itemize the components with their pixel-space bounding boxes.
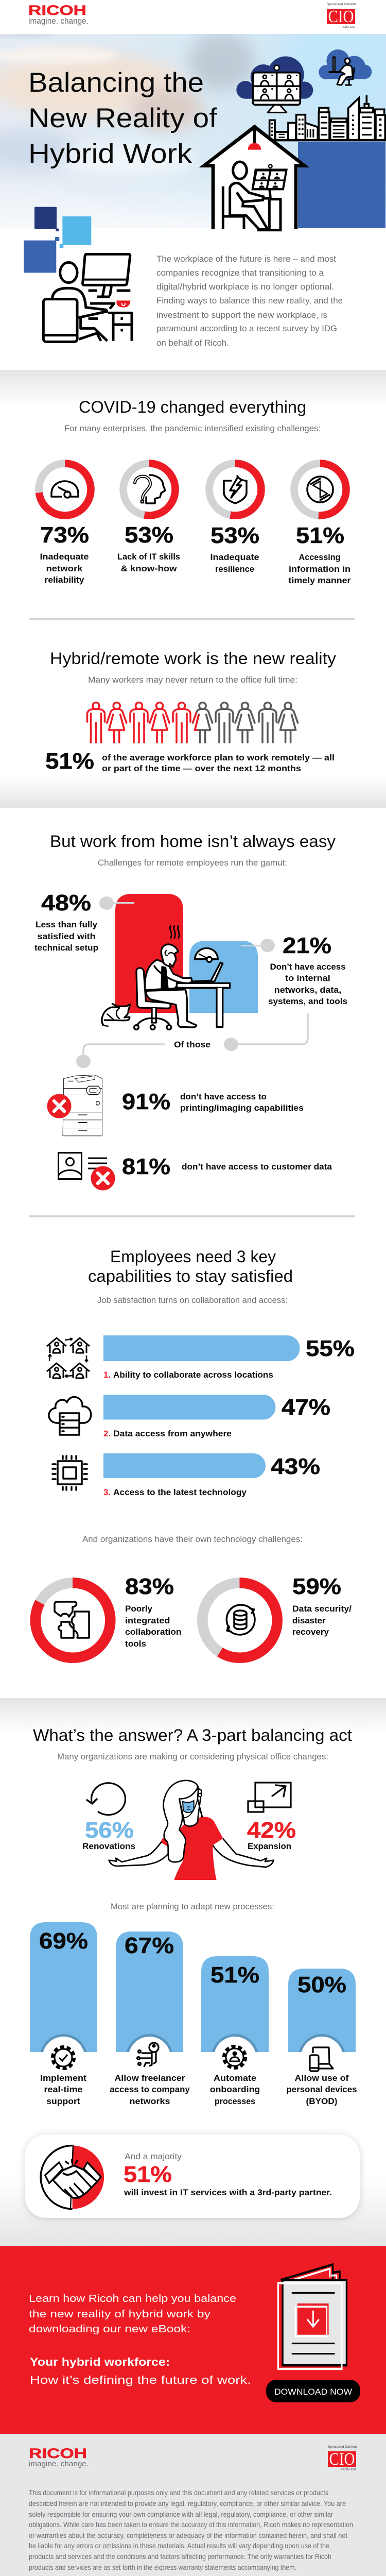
stat: 21%: 21% xyxy=(283,933,331,958)
heading: hybrid/remote: Hybrid/remote work is the new reality xyxy=(50,649,336,668)
stat 73%: Inadequate xyxy=(40,552,89,562)
icon: gear with clock xyxy=(52,2047,74,2069)
title: New Reality of xyxy=(28,103,217,133)
icon: printer with X xyxy=(47,1075,102,1136)
subheading: Challenges for remote employees run the gamut: xyxy=(98,858,287,868)
stat: 91%: don’t have access to xyxy=(180,1092,267,1101)
stat: 48% xyxy=(34,890,98,953)
stats: pandemic challenges xyxy=(40,522,351,585)
illustration: house with person on video call xyxy=(199,125,310,230)
stat 53% skills xyxy=(117,522,180,573)
bar column: 67% freelancer access: networks xyxy=(130,2096,170,2106)
logo: CIO sponsored content: FROM IDG xyxy=(340,26,355,29)
icon: shield with bolt xyxy=(224,476,247,503)
stat 53% resilience xyxy=(210,523,259,574)
disclaimer: obligations. While care has been taken to ensure the accuracy of this information, Ricoh makes no representation xyxy=(29,2520,353,2529)
bar: 47% data access: Data access from anywhere xyxy=(113,1429,232,1438)
stat: 48%: technical setup xyxy=(34,943,98,953)
bar: 55% collaborate: 55% xyxy=(306,1336,355,1361)
icon: eBook download xyxy=(278,2264,346,2369)
stat: 42% expansion: Expansion xyxy=(248,1841,291,1851)
title: Hybrid Work xyxy=(28,139,192,169)
bar column: 69% real-time support: support xyxy=(46,2096,80,2106)
stat: 83%: 83% xyxy=(125,1574,174,1599)
icon: renovations arrow xyxy=(86,1783,126,1815)
stat: 56% renovations: 56% xyxy=(85,1818,134,1843)
intro paragraph: The workplace of the future is here – and most xyxy=(156,254,336,264)
subheading: Many workers may never return to the office full time: xyxy=(88,675,297,685)
subheading: Job satisfaction turns on collaboration and access: xyxy=(97,1296,288,1305)
CTA text: the new reality of hybrid work by xyxy=(29,2309,210,2320)
disclaimer xyxy=(29,2488,353,2571)
bar: 47% data access xyxy=(103,1395,330,1438)
logo: CIO sponsored content: Sponsored Content xyxy=(327,3,356,6)
bar column: 50% BYOD: personal devices xyxy=(286,2084,357,2094)
disclaimer: be liable for any errors or omissions in these materials. Actual results will vary depending upon use of the xyxy=(29,2541,329,2550)
icon: handshake xyxy=(41,2145,104,2209)
bar column: 51% automate onboarding: Automate xyxy=(214,2073,256,2083)
bar: 43% latest technology: Access to the latest technology xyxy=(113,1487,247,1497)
stat: 51 percent remote: or part of the time — over the next 12 months xyxy=(102,764,301,773)
bar column: 51% automate onboarding xyxy=(201,1956,269,2106)
stat: 59%: disaster xyxy=(292,1616,326,1625)
intro paragraph: Finding ways to balance this new reality, and the xyxy=(156,296,343,306)
stat: 42% expansion: 42% xyxy=(247,1818,296,1843)
intro paragraph: on behalf of Ricoh. xyxy=(156,338,229,348)
card: third-party partner: 51% xyxy=(124,2162,172,2187)
stat: 83%: integrated xyxy=(125,1616,170,1625)
stat 51%: Accessing xyxy=(299,552,341,562)
icon: circuit key xyxy=(137,2043,159,2067)
blue block behind house xyxy=(298,142,385,228)
bar column: 50% BYOD: (BYOD) xyxy=(306,2096,338,2106)
bar column: 67% freelancer access: Allow freelancer xyxy=(114,2073,185,2083)
icon: database recovery xyxy=(226,1605,255,1635)
card: third-party partner: will invest in IT services with a 3rd-party partner. xyxy=(124,2188,332,2197)
icon: gauge xyxy=(51,481,78,498)
icon: connected houses xyxy=(47,1338,90,1378)
stat 53% skills: Lack of IT skills xyxy=(117,552,180,562)
stat: 83%: tools xyxy=(125,1639,146,1649)
connector: of those: Of those xyxy=(174,1040,210,1049)
icon: cloud server xyxy=(49,1397,91,1435)
donut: 83% collaboration tools xyxy=(36,1583,110,1658)
icon: microchip xyxy=(52,1456,87,1490)
intro paragraph xyxy=(156,254,343,348)
CTA text: Your hybrid workforce: xyxy=(30,2355,170,2368)
disclaimer: This document is for informational purposes only and this document and any related services or products xyxy=(29,2488,328,2497)
bar column: 67% freelancer access xyxy=(110,1931,190,2106)
hero background photo xyxy=(0,21,386,228)
stat: 91%: 91% xyxy=(122,1089,170,1114)
heading: three capabilities: capabilities to stay satisfied xyxy=(88,1267,293,1285)
stat 51%: timely manner xyxy=(288,575,351,585)
connector: 21% xyxy=(241,939,275,952)
logo: Ricoh: RICOH xyxy=(28,3,86,18)
bar: 43% latest technology xyxy=(103,1453,320,1497)
stat 51%: information in xyxy=(289,564,350,574)
intro paragraph: paramount according to a recent survey by IDG xyxy=(156,324,337,333)
title xyxy=(28,67,217,169)
stat: 91% xyxy=(122,1089,304,1114)
icon: head with question mark xyxy=(135,475,165,503)
stat: 56% renovations xyxy=(82,1818,135,1851)
stat: 51 percent remote: 51% xyxy=(45,749,94,774)
stat 73%: 73% xyxy=(40,522,89,548)
disclaimer: products and services and the conditions and factors affecting performance. The only warranties for Ricoh xyxy=(29,2552,331,2561)
bar: 55% collaborate xyxy=(103,1335,355,1380)
stat 73%: network xyxy=(46,564,83,573)
disclaimer: products and services are as set forth in the express warranty statements accompanying them. xyxy=(29,2563,296,2571)
heading: the answer: What’s the answer? A 3-part balancing act xyxy=(33,1726,352,1744)
heading: three capabilities xyxy=(88,1247,293,1285)
stat: 83%: collaboration xyxy=(125,1627,181,1637)
heading: three capabilities: Employees need 3 key xyxy=(110,1247,276,1266)
bar: red 48% xyxy=(115,894,183,1013)
connector: 48% xyxy=(99,896,134,910)
illustration: city skyline xyxy=(269,95,386,141)
logo: CIO sponsored content: CIO xyxy=(328,7,354,26)
CTA text: Learn how Ricoh can help you balance xyxy=(29,2293,236,2304)
call to action panel xyxy=(0,2246,386,2434)
icon: phone and laptop xyxy=(310,2047,333,2071)
stat: 48%: satisfied with xyxy=(37,931,96,941)
footer logo: CIO: FROM IDG xyxy=(341,2468,356,2471)
footer xyxy=(0,2434,386,2576)
subheading: new processes: Most are planning to adapt new processes: xyxy=(111,1902,274,1911)
bar column: 50% BYOD: 50% xyxy=(297,1972,346,1997)
stat: 21% xyxy=(268,933,347,1006)
stat: 21%: networks, data, xyxy=(274,985,341,995)
stat 53% skills: & know-how xyxy=(120,564,177,573)
stat: 59%: recovery xyxy=(292,1627,329,1637)
stat: 21%: to internal xyxy=(285,973,330,983)
bar column: 67% freelancer access: 67% xyxy=(125,1933,174,1958)
stat 51% xyxy=(288,523,351,585)
stat 53% resilience: 53% xyxy=(210,523,259,548)
stat: 21%: systems, and tools xyxy=(268,996,347,1006)
donut: 59% data security xyxy=(202,1583,277,1658)
footer logo: CIO: CIO xyxy=(329,2450,355,2469)
stat: 56% renovations: Renovations xyxy=(82,1841,135,1851)
bar column: 51% automate onboarding: 51% xyxy=(210,1962,259,1988)
icon: customer profile with X xyxy=(59,1153,115,1190)
subheading: For many enterprises, the pandemic intensified existing challenges: xyxy=(64,424,321,433)
icon: gear with person xyxy=(224,2046,245,2068)
stat: 59% xyxy=(292,1574,352,1637)
CTA text: downloading our new eBook: xyxy=(29,2324,190,2335)
stat: 81%: don’t have access to customer data xyxy=(182,1162,332,1172)
footer logo: Ricoh: RICOH xyxy=(29,2446,87,2461)
stat: 51 percent remote: of the average workforce plan to work remotely — all xyxy=(102,753,335,762)
heading: work from home: But work from home isn’t always easy xyxy=(50,832,336,851)
section gradient band xyxy=(0,1698,386,1733)
CTA text xyxy=(29,2293,251,2386)
decorative squares xyxy=(24,207,91,273)
bar column: 69% real-time support: 69% xyxy=(39,1928,88,1954)
title: Balancing the xyxy=(28,67,204,98)
icon: expansion arrow xyxy=(248,1783,291,1812)
stat: 81%: 81% xyxy=(122,1154,170,1179)
disclaimer: solely responsible for ensuring your own compliance with all legal, regulatory, compliance, or other similar xyxy=(29,2510,333,2518)
stat 53% skills: 53% xyxy=(125,522,173,548)
intro paragraph: investment to support the new workplace, is xyxy=(156,310,327,320)
button: download now: DOWNLOAD NOW xyxy=(274,2387,352,2397)
bar: 55% collaborate: Ability to collaborate across locations xyxy=(113,1370,273,1380)
card: third-party partner xyxy=(25,2134,360,2219)
donut: 51% accessing information xyxy=(294,464,346,515)
subheading: Many organizations are making or considering physical office changes: xyxy=(57,1752,328,1761)
bar column: 51% automate onboarding: onboarding xyxy=(210,2084,260,2094)
illustration: stressed man at desk with cat xyxy=(102,926,230,1029)
icon: puzzle xyxy=(55,1602,89,1638)
bar column: 67% freelancer access: access to company xyxy=(110,2084,190,2094)
logo: Ricoh: imagine. change. xyxy=(28,16,89,26)
bar: 47% data access: 47% xyxy=(282,1395,330,1420)
stat 53% resilience: resilience xyxy=(215,564,254,574)
bar column: 50% BYOD xyxy=(286,1969,357,2106)
footer logo: CIO: Sponsored Content xyxy=(328,2445,357,2449)
subheading: organizations: And organizations have their own technology challenges: xyxy=(82,1535,303,1544)
bar column: 69% real-time support xyxy=(30,1922,97,2106)
illustration: video call cloud xyxy=(236,56,313,112)
logo: Ricoh xyxy=(28,3,89,26)
intro paragraph: digital/hybrid workplace is no longer optional. xyxy=(156,282,334,292)
footer logo: Ricoh: imagine. change. xyxy=(29,2460,89,2468)
footer logo: CIO xyxy=(328,2445,357,2471)
stat: 48%: 48% xyxy=(41,890,91,916)
bar: 47% data access: 2. xyxy=(103,1429,111,1438)
illustration: remote worker cloud xyxy=(319,49,372,85)
illustration: woman with mask balancing xyxy=(109,1781,274,1880)
section gradient band xyxy=(0,370,386,406)
donut: 53% IT skills xyxy=(124,464,175,515)
section gradient band xyxy=(0,775,386,808)
stat: 83%: Poorly xyxy=(125,1604,153,1614)
stat: 59%: Data security/ xyxy=(292,1604,352,1614)
disclaimer: or warranties about the accuracy, completeness or adequacy of the information contained herein, and shall not xyxy=(29,2531,347,2539)
button: download now xyxy=(266,2380,360,2402)
bar column: 69% real-time support: Implement xyxy=(40,2073,86,2083)
intro paragraph: companies recognize that transitioning to a xyxy=(156,268,324,278)
bar: blue 21% xyxy=(189,941,258,1013)
bar column: 69% real-time support: real-time xyxy=(44,2084,82,2094)
illustration: worker at desktop computer xyxy=(43,254,132,342)
section gradient band xyxy=(0,2179,386,2246)
donut: 73% network reliability xyxy=(39,464,91,515)
stat: 42% expansion xyxy=(247,1818,296,1851)
connector: of those xyxy=(76,1013,308,1068)
stat: 48%: Less than fully xyxy=(36,920,98,929)
stat 53% resilience: Inadequate xyxy=(210,552,259,562)
bar: 43% latest technology: 43% xyxy=(271,1454,320,1479)
stat 73% xyxy=(40,522,89,585)
card: third-party partner: And a majority xyxy=(125,2152,182,2161)
logo: CIO sponsored content xyxy=(327,3,356,29)
stat: 83% xyxy=(125,1574,181,1649)
bar column: 51% automate onboarding: processes xyxy=(215,2096,255,2106)
stat 51%: 51% xyxy=(296,523,344,548)
heading: COVID-19: COVID-19 changed everything xyxy=(79,398,306,416)
donut: 53% resilience xyxy=(209,464,261,515)
icon: hourglass clock xyxy=(307,477,333,502)
stat 73%: reliability xyxy=(44,575,84,585)
disclaimer: described herein are not intended to provide any legal, regulatory, compliance, or other similar advice. You are xyxy=(29,2499,346,2507)
stat: 91%: printing/imaging capabilities xyxy=(180,1103,304,1113)
stat: 51 percent remote xyxy=(45,749,335,774)
bar: 55% collaborate: 1. xyxy=(103,1370,111,1380)
stat: 21%: Don’t have access xyxy=(270,962,346,972)
pictogram: 51 percent of workers xyxy=(87,703,298,742)
bar column: 50% BYOD: Allow use of xyxy=(294,2073,349,2083)
stat: 81% xyxy=(122,1154,332,1179)
bar: 43% latest technology: 3. xyxy=(103,1487,111,1497)
CTA text: How it’s defining the future of work. xyxy=(30,2374,251,2386)
stat: 59%: 59% xyxy=(292,1574,341,1599)
footer logo: Ricoh xyxy=(29,2446,89,2468)
